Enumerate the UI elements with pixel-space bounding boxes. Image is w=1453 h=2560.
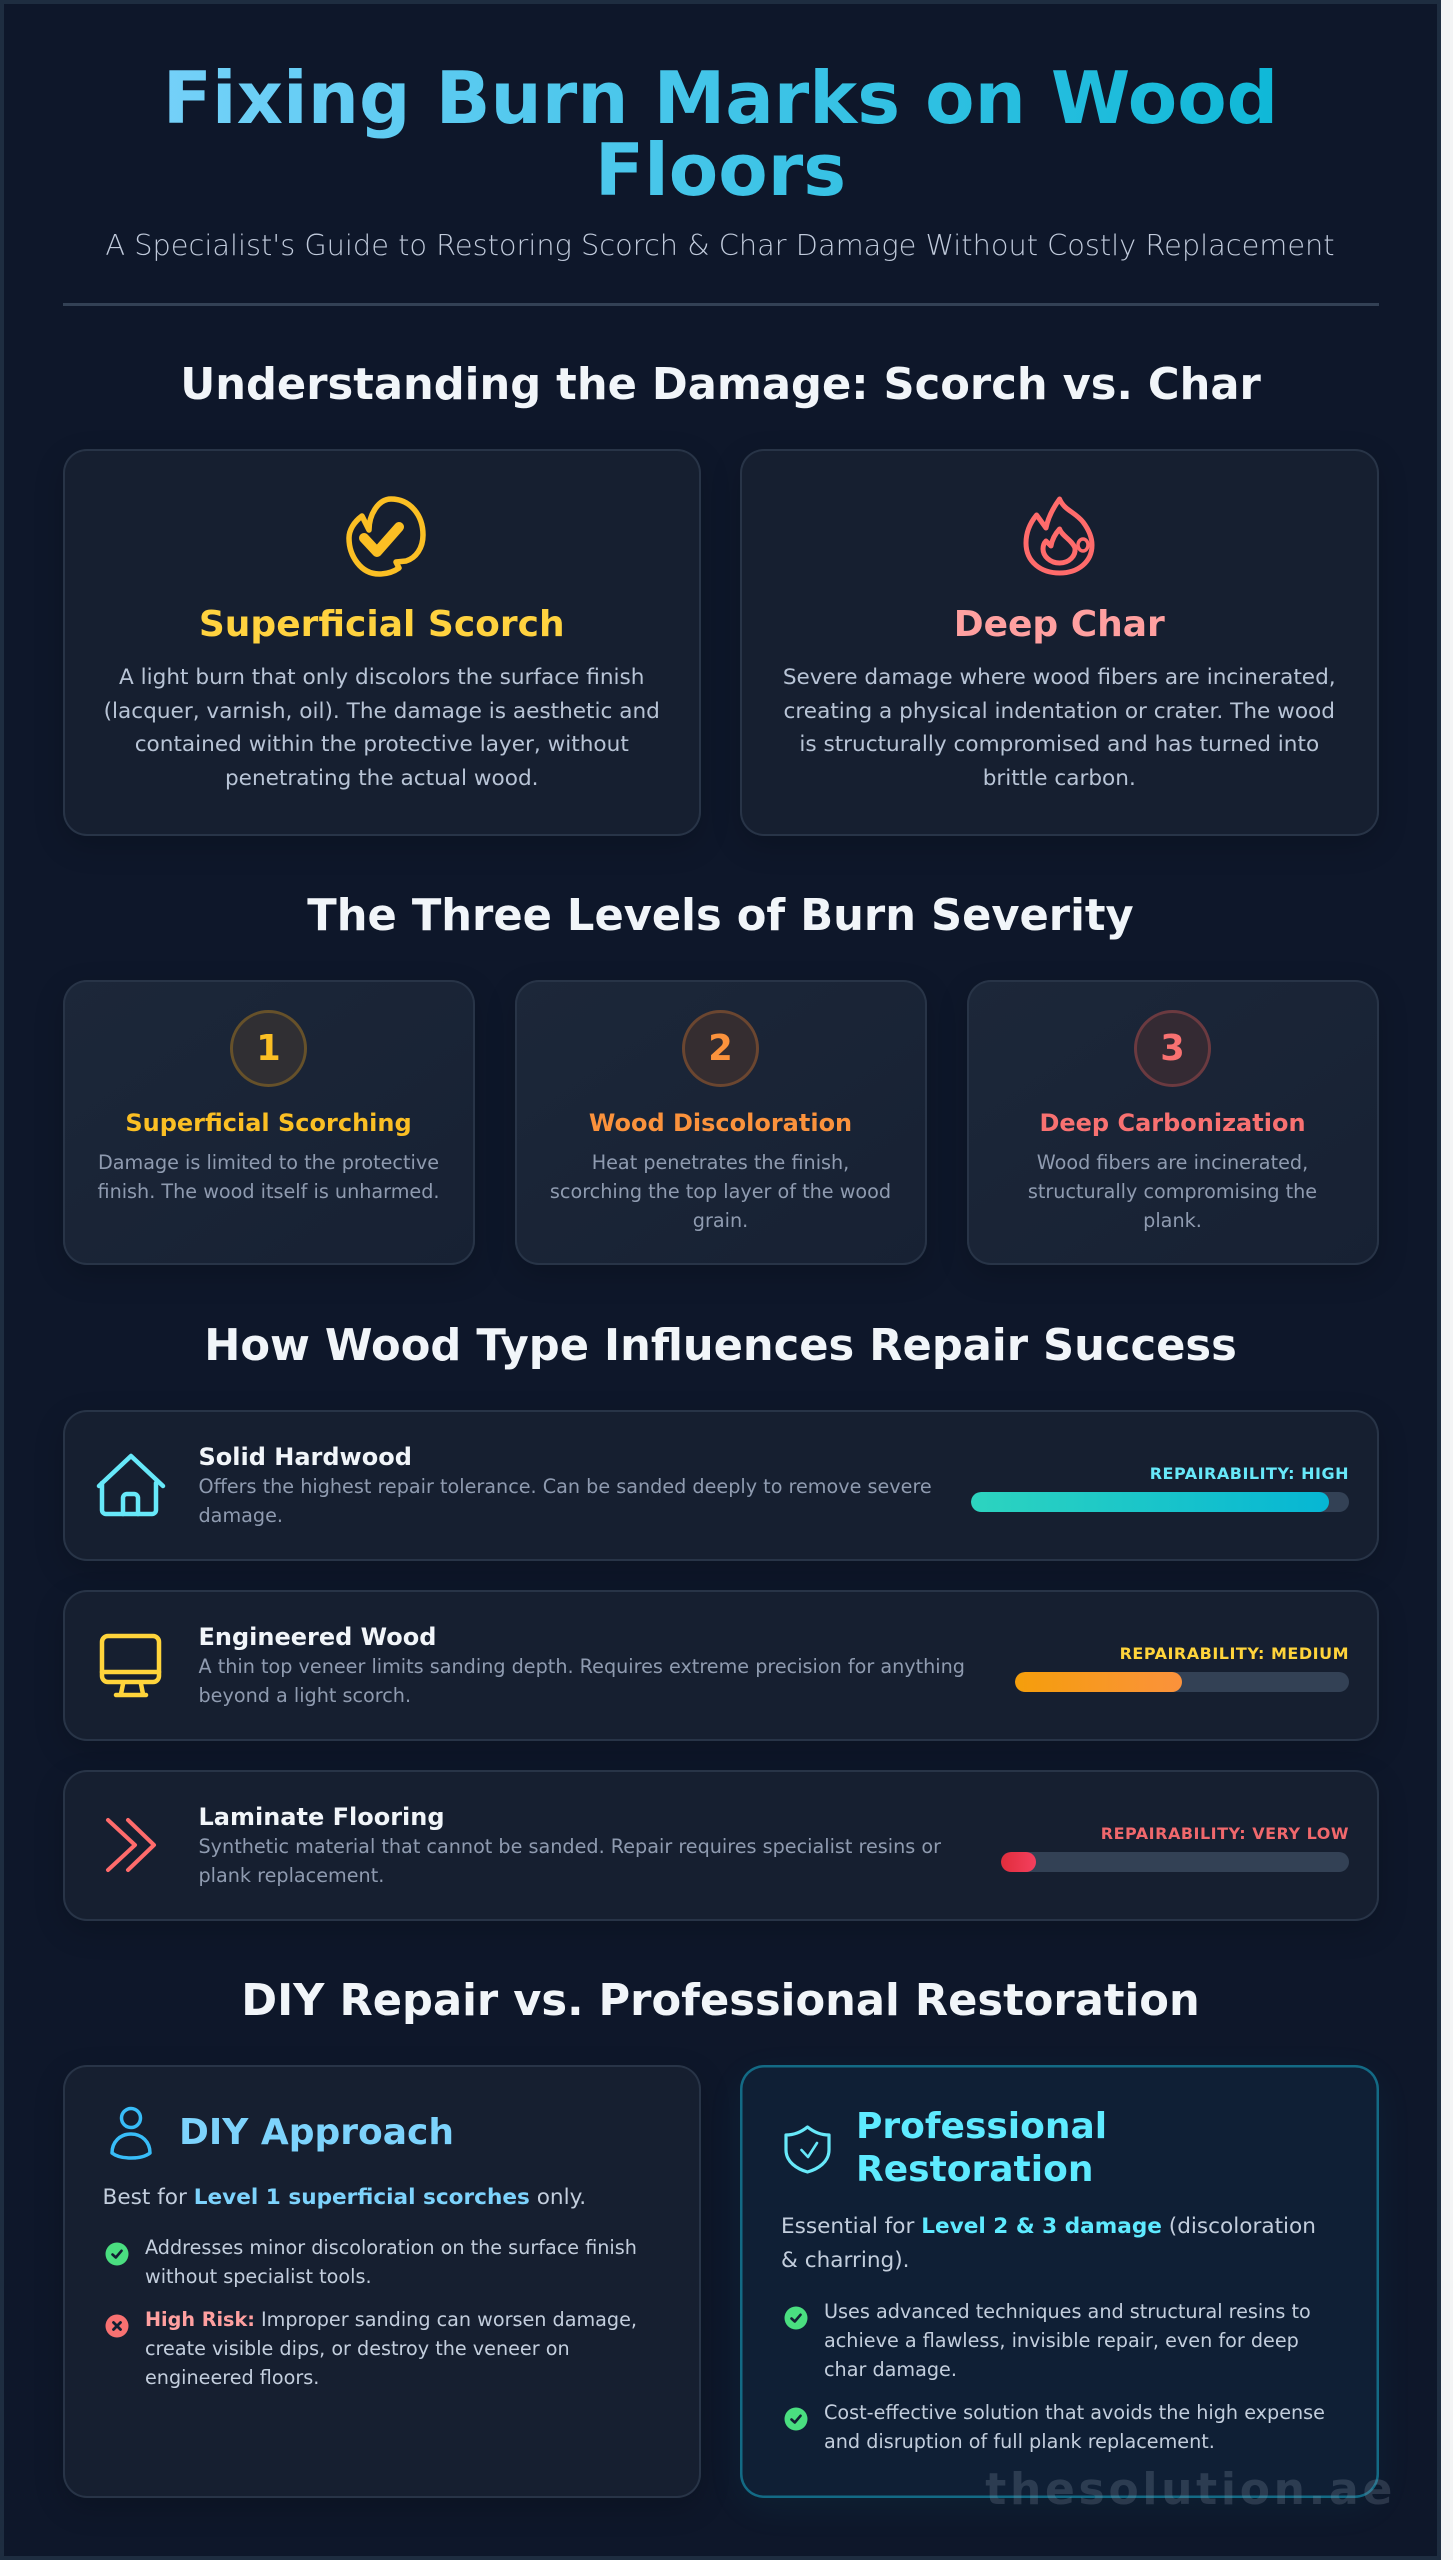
professional intro: Essential for Level 2 & 3 damage (discoloration — [781, 2214, 1316, 2239]
diy benefit: Addresses minor discoloration on the surface finish — [145, 2236, 637, 2259]
level 3 badge: 3 — [1160, 1028, 1185, 1069]
scorch description: (lacquer, varnish, oil). The damage is aesthetic and — [104, 699, 660, 724]
scorch description: contained within the protective layer, without — [135, 732, 629, 757]
professional benefit 1: achieve a flawless, invisible repair, even for deep — [824, 2329, 1299, 2352]
level 2 description: scorching the top layer of the wood — [550, 1180, 891, 1203]
laminate description: plank replacement. — [198, 1864, 384, 1887]
char description: brittle carbon. — [983, 766, 1136, 791]
icon: check — [784, 2408, 808, 2430]
scorch heading: Superficial Scorch — [199, 604, 565, 645]
engineered wood description — [198, 1655, 965, 1707]
repairability label: medium: REPAIRABILITY: MEDIUM — [1120, 1644, 1349, 1662]
professional heading: Restoration — [856, 2149, 1093, 2190]
diy benefit — [145, 2236, 637, 2288]
level 1 description: finish. The wood itself is unharmed. — [97, 1180, 440, 1203]
repairability bar: medium — [1015, 1672, 1349, 1692]
level 3 description — [1028, 1151, 1317, 1232]
icon: chevrons — [106, 1818, 156, 1872]
icon: cross — [106, 2314, 128, 2338]
solid hardwood description — [198, 1475, 932, 1527]
professional benefit 1: Uses advanced techniques and structural resins to — [824, 2300, 1311, 2323]
repairability bar: high — [971, 1492, 1349, 1512]
panel: level 3 — [966, 980, 1378, 1265]
title — [62, 62, 1378, 206]
scorch description: penetrating the actual wood. — [225, 766, 539, 791]
char description: creating a physical indentation or crater. The wood — [784, 699, 1335, 724]
panel: level 2 — [514, 980, 926, 1265]
icon: monitor — [100, 1634, 162, 1698]
panel: level 1 — [62, 980, 474, 1265]
panel: engineered wood — [62, 1590, 1378, 1740]
heading: understanding the damage: Understanding the Damage: Scorch vs. Char — [180, 360, 1261, 410]
level 3 heading: Deep Carbonization — [1039, 1109, 1306, 1137]
repairability bar: very low — [1001, 1852, 1349, 1872]
char description: is structurally compromised and has turned into — [799, 732, 1319, 757]
level 1 badge: 1 — [256, 1028, 281, 1069]
heading: wood type: How Wood Type Influences Repair Success — [204, 1320, 1237, 1370]
panel: professional restoration — [740, 2065, 1378, 2498]
watermark: thesolution.ae — [985, 2464, 1396, 2515]
icon: shield — [784, 2125, 831, 2174]
solid hardwood heading: Solid Hardwood — [198, 1443, 412, 1471]
icon: check — [106, 2242, 128, 2266]
scorch description: A light burn that only discolors the surface finish — [119, 665, 644, 690]
diy risk — [145, 2308, 637, 2389]
professional intro — [781, 2214, 1316, 2273]
repairability label: high: REPAIRABILITY: HIGH — [1150, 1464, 1349, 1482]
icon: flame — [1024, 496, 1094, 576]
panel: deep char — [740, 449, 1378, 836]
professional heading — [856, 2106, 1107, 2190]
heading: diy vs professional: DIY Repair vs. Professional Restoration — [241, 1976, 1200, 2026]
professional heading: Professional — [856, 2106, 1107, 2147]
level 1 badge — [230, 1010, 307, 1087]
laminate description: Synthetic material that cannot be sanded. Repair requires specialist resins or — [198, 1835, 941, 1858]
diy benefit: without specialist tools. — [145, 2265, 372, 2288]
title: Floors — [595, 128, 846, 212]
diy risk: engineered floors. — [145, 2366, 319, 2389]
level 3 description: plank. — [1143, 1209, 1202, 1232]
level 3 description: structurally compromising the — [1028, 1180, 1317, 1203]
char description: Severe damage where wood fibers are incinerated, — [783, 665, 1336, 690]
diy risk: create visible dips, or destroy the veneer on — [145, 2337, 570, 2360]
laminate heading: Laminate Flooring — [198, 1803, 445, 1831]
repairability label: very low: REPAIRABILITY: VERY LOW — [1101, 1824, 1349, 1842]
professional benefit 1: char damage. — [824, 2358, 957, 2381]
level 2 badge — [682, 1010, 759, 1087]
icon: scorch check — [346, 496, 426, 577]
panel: superficial scorch — [62, 449, 701, 836]
professional benefit 2: Cost-effective solution that avoids the high expense — [824, 2401, 1325, 2424]
level 3 description: Wood fibers are incinerated, — [1037, 1151, 1308, 1174]
diy intro: Best for Level 1 superficial scorches only. — [102, 2185, 586, 2210]
title: Fixing Burn Marks on Wood — [163, 56, 1278, 140]
laminate description — [198, 1835, 941, 1887]
subtitle: A Specialist's Guide to Restoring Scorch & Char Damage Without Costly Replacement — [105, 228, 1335, 262]
engineered wood description: A thin top veneer limits sanding depth. Requires extreme precision for anything — [198, 1655, 965, 1678]
diy heading: DIY Approach — [179, 2112, 454, 2153]
heading: three levels: The Three Levels of Burn Severity — [307, 891, 1134, 941]
panel: diy approach — [62, 2065, 701, 2498]
engineered wood heading: Engineered Wood — [198, 1623, 436, 1651]
solid hardwood description: Offers the highest repair tolerance. Can be sanded deeply to remove severe — [198, 1475, 932, 1498]
level 2 description — [550, 1151, 891, 1232]
solid hardwood description: damage. — [198, 1504, 283, 1527]
level 2 description: grain. — [693, 1209, 748, 1232]
level 2 description: Heat penetrates the finish, — [592, 1151, 849, 1174]
icon: house — [96, 1454, 166, 1516]
level 1 description: Damage is limited to the protective — [98, 1151, 439, 1174]
level 2 badge: 2 — [708, 1028, 733, 1069]
engineered wood description: beyond a light scorch. — [198, 1684, 411, 1707]
level 1 heading: Superficial Scorching — [125, 1109, 412, 1137]
char heading: Deep Char — [954, 604, 1165, 645]
level 1 description — [97, 1151, 440, 1203]
professional intro: & charring). — [781, 2248, 910, 2273]
icon: user — [110, 2106, 152, 2160]
professional benefit 2: and disruption of full plank replacement. — [824, 2430, 1215, 2453]
diy risk: High Risk: Improper sanding can worsen damage, — [145, 2308, 637, 2331]
panel: solid hardwood — [62, 1410, 1378, 1560]
char description — [783, 665, 1336, 791]
level 2 heading: Wood Discoloration — [589, 1109, 852, 1137]
scorch description — [104, 665, 660, 791]
icon: check — [784, 2306, 808, 2330]
professional benefit 2 — [824, 2401, 1325, 2453]
professional benefit 1 — [824, 2300, 1311, 2381]
level 3 badge — [1134, 1010, 1211, 1087]
panel: laminate flooring — [62, 1770, 1378, 1920]
